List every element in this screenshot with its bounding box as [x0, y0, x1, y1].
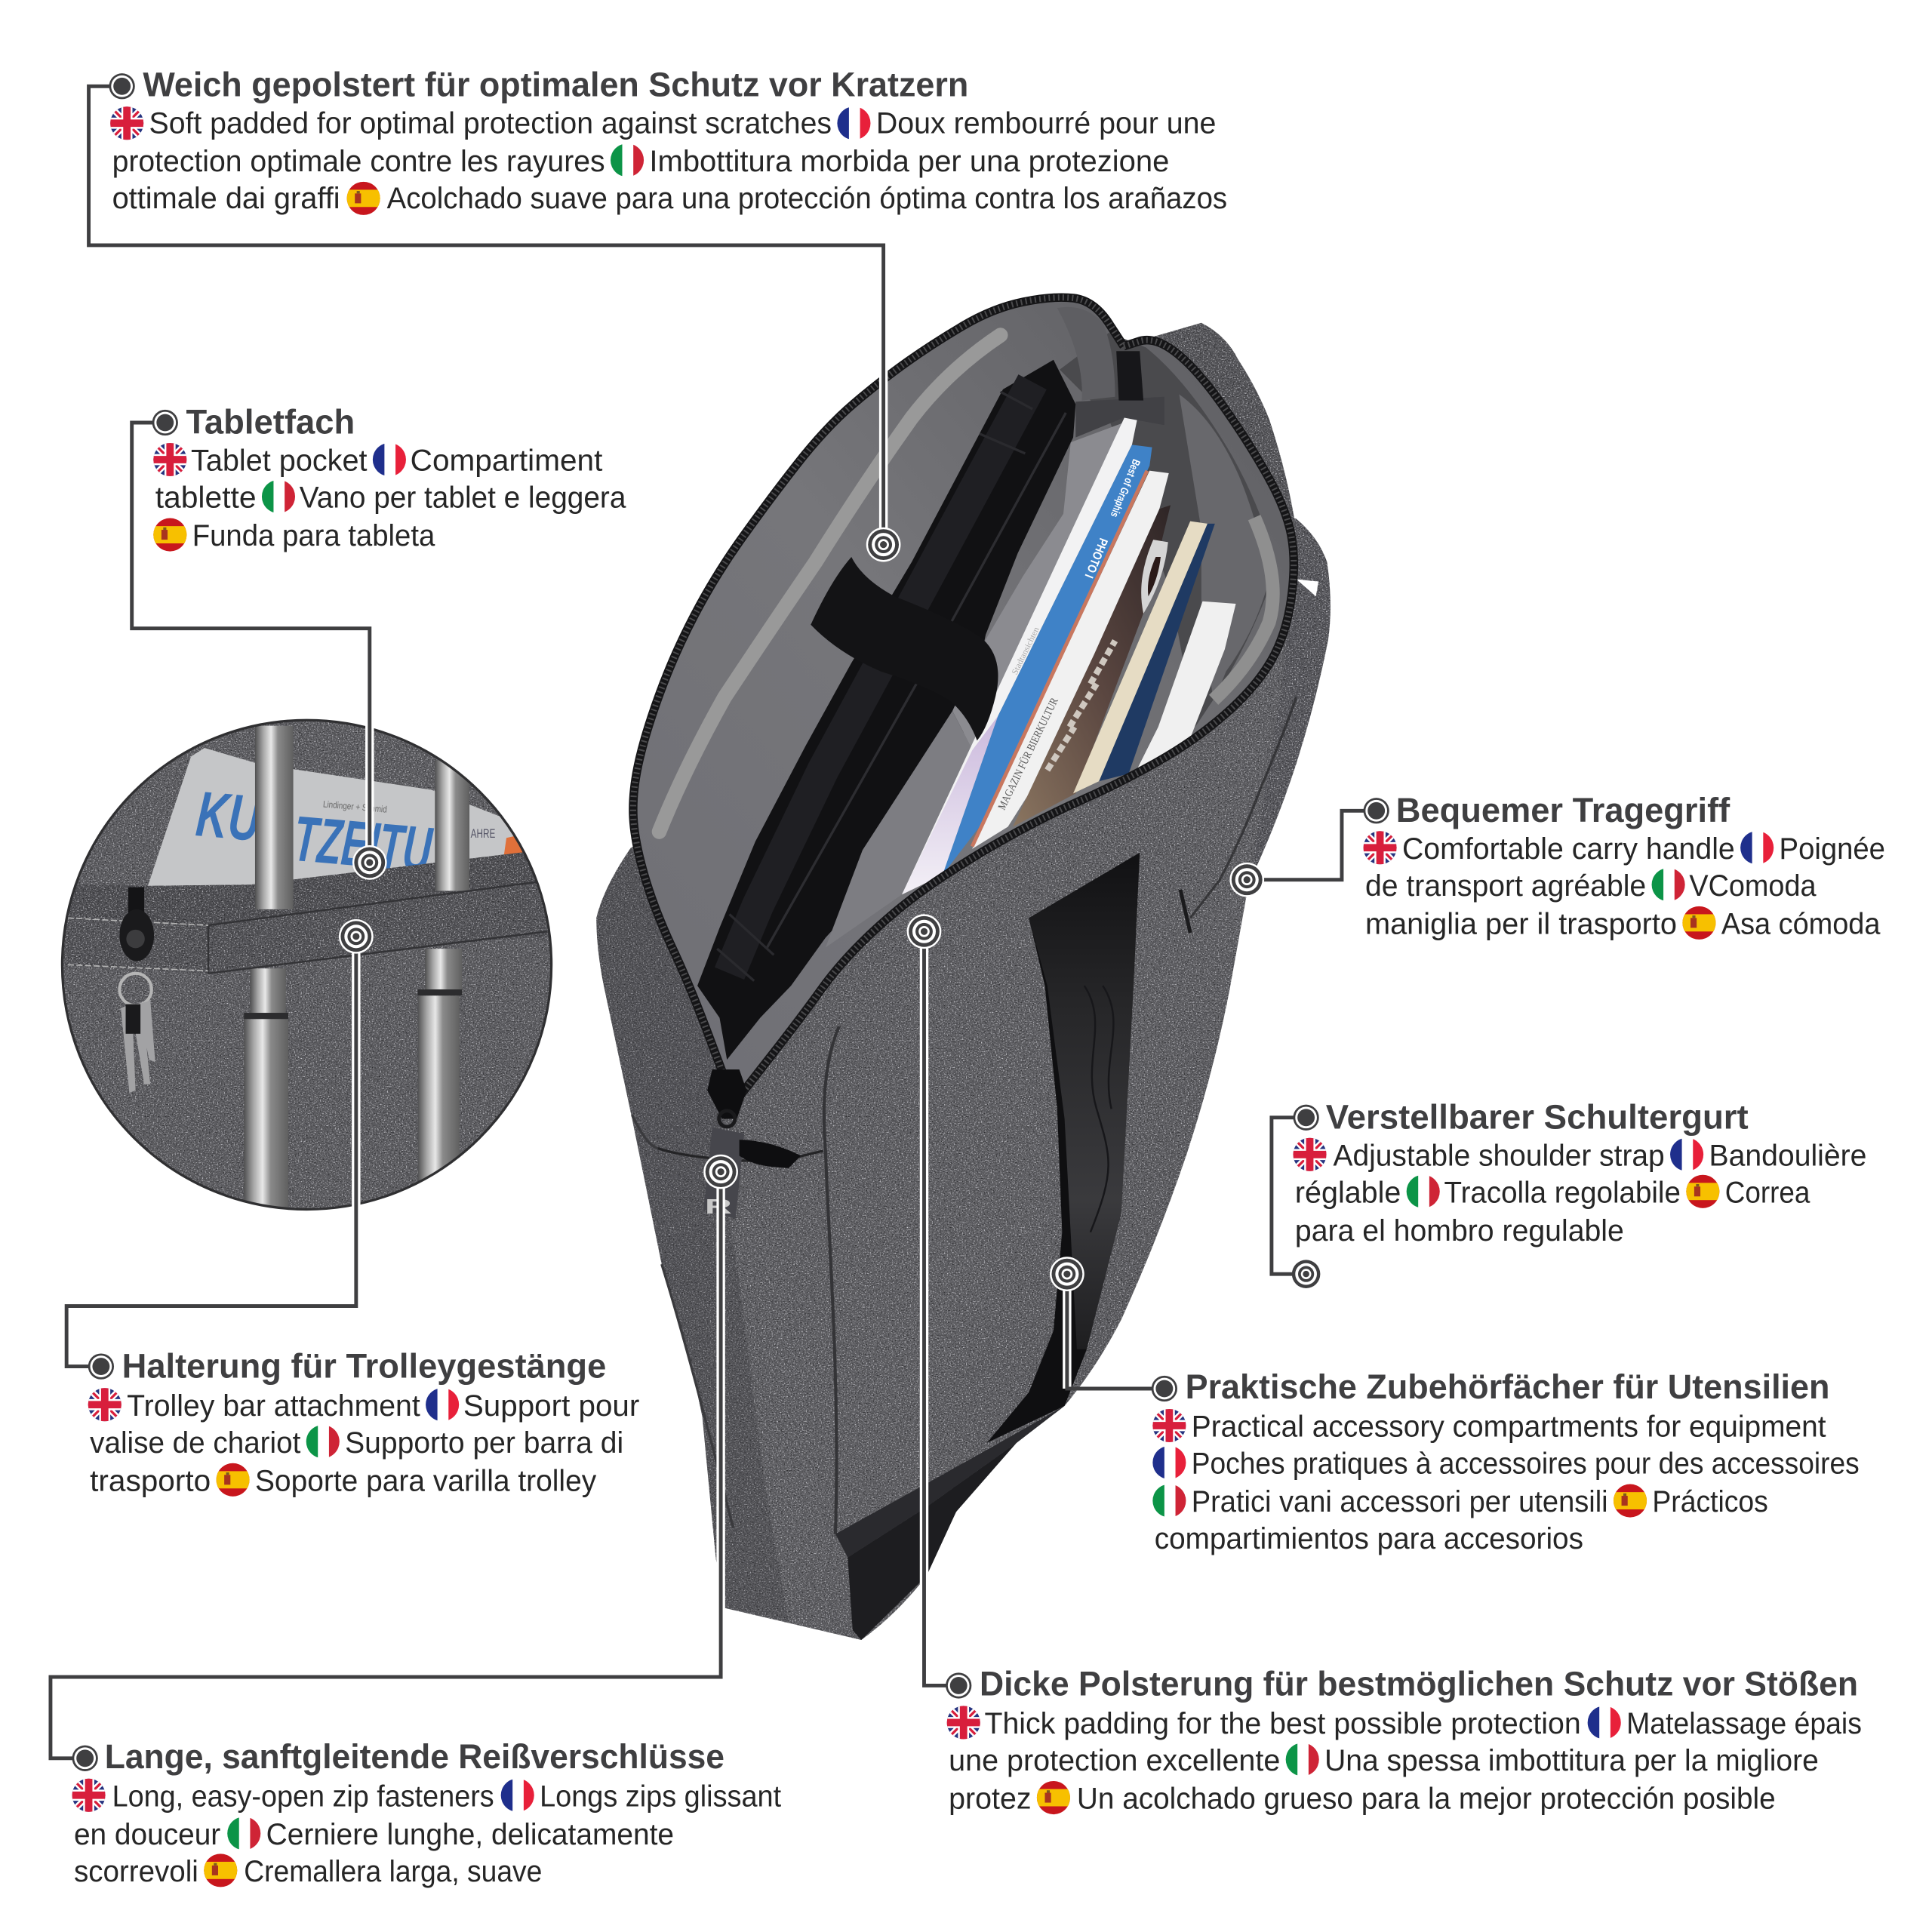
- flag FR: [500, 1778, 536, 1813]
- body text: Prácticos: [1652, 1485, 1768, 1518]
- rear black patch: [1116, 351, 1143, 401]
- flag UK: [1152, 1408, 1186, 1443]
- key dark head: [126, 1004, 140, 1034]
- laptop highlight: [730, 382, 1032, 974]
- target: padding: [866, 528, 900, 561]
- rear top handle: [1146, 323, 1297, 555]
- leader lines: [51, 86, 1377, 1758]
- right pole base: [417, 995, 460, 1180]
- flag UK: [109, 106, 144, 140]
- zipper: [633, 297, 1294, 1097]
- flag IT: [610, 143, 646, 177]
- body text: Vano per tablet e leggera: [300, 481, 626, 515]
- body text: Practical accessory compartments for equipment: [1192, 1411, 1826, 1444]
- body text: Tracolla regolabile: [1444, 1176, 1681, 1209]
- bottom leather trim: [835, 1406, 1065, 1558]
- body text: Long, easy-open zip fasteners: [112, 1780, 494, 1813]
- left pole collar: [244, 1013, 288, 1019]
- laptop: [697, 360, 1075, 1060]
- key ring: [119, 974, 152, 1005]
- target: zip: [703, 1155, 738, 1189]
- body text: Longs zips glissant: [540, 1780, 781, 1813]
- gap in handle: [1297, 579, 1318, 596]
- band left fabric seam: [68, 918, 208, 971]
- target: handle: [1229, 863, 1264, 897]
- flag ES: [1613, 1484, 1647, 1518]
- body text: Comfortable carry handle: [1402, 832, 1735, 866]
- target: tablet: [352, 845, 387, 880]
- heading: Weich gepolstert für optimalen Schutz vor Kratzern: [143, 65, 968, 103]
- body text: Poches pratiques à accessoires pour des accessoires: [1192, 1447, 1860, 1481]
- callout: soft padding: [109, 65, 1227, 216]
- key clip: [119, 909, 154, 961]
- target: trolley: [339, 919, 374, 954]
- top fold lining: [1057, 307, 1115, 401]
- laptop joint lines: [717, 392, 1032, 981]
- inset magazine small text: Lindinger + Schmid: [322, 798, 387, 815]
- body text: Adjustable shoulder strap: [1334, 1139, 1665, 1172]
- white magazine 3: [972, 471, 1169, 849]
- flag UK: [946, 1706, 981, 1740]
- flag FR: [425, 1387, 461, 1422]
- bullet: [1293, 1105, 1319, 1131]
- lining piping left: [659, 335, 1001, 832]
- body text: Poignée: [1780, 832, 1885, 866]
- flag ES: [1036, 1780, 1071, 1815]
- laptop edge line: [767, 413, 1066, 949]
- photo magazine bands: [1048, 641, 1115, 770]
- flag FR: [372, 442, 408, 477]
- body text: para el hombro regulable: [1295, 1214, 1624, 1247]
- heading: Dicke Polsterung für bestmöglichen Schutz vor Stößen: [980, 1665, 1858, 1703]
- body text: réglable: [1295, 1176, 1401, 1209]
- flag IT: [1651, 867, 1687, 902]
- heading: Praktische Zubehörfächer für Utensilien: [1186, 1367, 1829, 1406]
- body text: VComoda: [1689, 869, 1817, 903]
- body text: Supporto per barra di: [345, 1426, 623, 1460]
- flag FR: [1669, 1137, 1706, 1172]
- trolley strap band: [63, 910, 522, 974]
- inset magazine title left: KU: [193, 777, 265, 854]
- bullet: [152, 410, 178, 435]
- callout: accessory compartments: [1152, 1367, 1860, 1555]
- white book: [1137, 601, 1236, 769]
- zipper clip: [740, 1140, 801, 1168]
- key clip strap: [128, 888, 144, 914]
- body text: Una spessa imbottitura per la migliore: [1324, 1744, 1819, 1777]
- inset pocket fabric: [69, 853, 549, 940]
- body text: Thick padding for the best possible protection: [984, 1707, 1581, 1740]
- heading: Lange, sanftgleitende Reißverschlüsse: [105, 1737, 724, 1776]
- callout: carry handle: [1363, 791, 1885, 941]
- bag photo illustration: [596, 297, 1331, 1640]
- flag IT: [1285, 1743, 1321, 1777]
- side pocket seam: [658, 1149, 823, 1161]
- zipper pull tab: [703, 1128, 744, 1219]
- body text: une protection excellente: [949, 1744, 1280, 1777]
- callout: zip fasteners: [72, 1737, 781, 1888]
- flag UK: [152, 442, 187, 477]
- flag IT: [1152, 1484, 1188, 1518]
- keys: [121, 1001, 155, 1093]
- body text: Soporte para varilla trolley: [255, 1465, 596, 1498]
- flag IT: [306, 1424, 341, 1459]
- bullet: [88, 1353, 114, 1380]
- inset circle photo: trolley attachment: [62, 719, 555, 1210]
- inset magazine year text: AHRE: [471, 827, 495, 841]
- callout: shoulder strap: [1293, 1098, 1866, 1247]
- body text: protez: [949, 1783, 1032, 1816]
- body text: Compartiment: [411, 445, 602, 478]
- inset fabric: [62, 719, 555, 1210]
- right pole upper: [435, 760, 469, 891]
- body text: protection optimale contre les rayures: [112, 145, 605, 178]
- salmon spine: [972, 471, 1147, 847]
- blue magazine: [943, 445, 1152, 875]
- heading: Tabletfach: [186, 403, 355, 441]
- flag FR: [1587, 1706, 1623, 1740]
- body text: Asa cómoda: [1721, 908, 1881, 941]
- tab logo: R: [705, 1195, 732, 1218]
- heading: Bequemer Tragegriff: [1396, 791, 1730, 829]
- bullet: [946, 1672, 971, 1699]
- inset orange corner: [504, 836, 522, 854]
- flag IT: [1406, 1174, 1441, 1209]
- flag UK: [1293, 1137, 1327, 1172]
- body text: Trolley bar attachment: [127, 1389, 420, 1423]
- bag body fabric: [596, 616, 1289, 1640]
- body text: Acolchado suave para una protección óptima contra los arañazos: [387, 182, 1227, 215]
- flag FR: [1740, 830, 1776, 865]
- heading: Verstellbarer Schultergurt: [1326, 1098, 1749, 1137]
- flag FR: [837, 106, 872, 140]
- rear right lining: [1179, 394, 1269, 703]
- left pole base: [244, 1019, 288, 1208]
- lower lining: [826, 711, 974, 948]
- strip embossing: [1084, 986, 1113, 1232]
- carry handle: [1180, 515, 1331, 933]
- spine text: Best of Graphis: [1108, 457, 1142, 519]
- bullet: [1152, 1376, 1177, 1401]
- spine text 4: Stadtansichten: [1011, 626, 1041, 676]
- carry handle flap: [1180, 890, 1190, 933]
- inner pocket lining: [952, 423, 1124, 752]
- flag ES: [216, 1463, 250, 1497]
- flag ES: [1682, 906, 1716, 940]
- body text: ottimale dai graffi: [112, 182, 340, 215]
- body text: Pratici vani accessori per utensili: [1192, 1485, 1608, 1518]
- photo magazine crescent: [1141, 540, 1168, 614]
- magazines and books: [902, 417, 1236, 894]
- callout: tablet pocket: [152, 403, 626, 552]
- flag ES: [203, 1854, 238, 1887]
- inset circle outline: [62, 720, 552, 1209]
- body text: trasporto: [90, 1465, 211, 1498]
- body text: Cerniere lunghe, delicatamente: [266, 1818, 674, 1851]
- flag UK: [1363, 830, 1397, 865]
- body text: de transport agréable: [1365, 869, 1646, 903]
- bottom mesh: [848, 1443, 1017, 1640]
- rear top band: [1075, 397, 1164, 438]
- body text: Tablet pocket: [191, 445, 368, 478]
- black webbing strap: [811, 557, 998, 740]
- body text: valise de chariot: [90, 1426, 300, 1460]
- bullet: [1364, 798, 1389, 823]
- target: thick padding: [907, 914, 941, 949]
- right pole lower: [425, 949, 462, 993]
- black panel shadow: [987, 918, 1109, 1443]
- navy book: [1099, 524, 1215, 781]
- flag ES: [152, 518, 187, 552]
- body text: Funda para tableta: [192, 519, 435, 552]
- flag ES: [346, 181, 380, 216]
- front panel seam: [824, 1026, 839, 1534]
- side panel shade: [596, 848, 789, 1622]
- bullet: [72, 1746, 98, 1771]
- body text: Doux rembourré pour une: [876, 106, 1216, 140]
- zipper teeth: [633, 297, 1294, 1097]
- lining piping right: [1214, 518, 1273, 700]
- flag ES: [1685, 1174, 1720, 1209]
- dark photo magazine: [1013, 505, 1171, 827]
- spine text 3: MAGAZIN FÜR BIERKULTUR: [995, 696, 1061, 812]
- body text: Cremallera larga, suave: [244, 1855, 542, 1888]
- cream book: [1073, 521, 1208, 793]
- body text: Imbottitura morbida per una protezione: [649, 145, 1169, 178]
- body text: Soft padded for optimal protection against scratches: [149, 106, 832, 140]
- inset magazine: [148, 748, 524, 886]
- black centre strip: [1029, 853, 1140, 1349]
- body text: Bandoulière: [1709, 1139, 1866, 1172]
- body text: en douceur: [74, 1818, 220, 1851]
- target: shoulder strap: [1292, 1260, 1320, 1288]
- callout: thick padding: [946, 1665, 1862, 1816]
- key clip button: [126, 930, 145, 948]
- flag IT: [226, 1817, 263, 1850]
- left pole upper: [255, 726, 294, 909]
- flag IT: [261, 479, 297, 514]
- target: compartments: [1050, 1257, 1084, 1291]
- body text: compartimientos para accesorios: [1155, 1522, 1583, 1555]
- flag UK: [88, 1387, 122, 1422]
- right pole collar: [417, 989, 462, 995]
- band edges: [208, 881, 547, 974]
- flag FR: [1152, 1445, 1188, 1480]
- zipper slider: [707, 1069, 746, 1118]
- body text: Un acolchado grueso para la mejor protección posible: [1077, 1783, 1776, 1816]
- target markers: [339, 528, 1320, 1291]
- lavender cover: [902, 716, 998, 894]
- left pole lower: [250, 968, 286, 1019]
- body text: Correa: [1725, 1176, 1810, 1209]
- body text: Support pour: [463, 1389, 639, 1423]
- carry handle inner edge: [1190, 697, 1297, 918]
- heading: Halterung für Trolleygestänge: [122, 1346, 606, 1385]
- callout: trolley attachment: [88, 1346, 639, 1498]
- body text: Matelassage épais: [1626, 1707, 1862, 1740]
- bullet: [109, 73, 135, 99]
- spine text 2: PHOTO I: [1081, 536, 1110, 580]
- body text: scorrevoli: [74, 1855, 198, 1888]
- white magazine: [902, 417, 1137, 894]
- inset magazine title right: TZEITU: [291, 802, 435, 886]
- zipper ring: [719, 1111, 735, 1127]
- bag interior lining: [633, 297, 1294, 1097]
- body text: tablette: [155, 481, 257, 515]
- rear dark lining: [1060, 333, 1276, 727]
- body text: maniglia per il trasporto: [1365, 908, 1677, 941]
- photo magazine crescent centre: [1148, 557, 1161, 596]
- leader lines: white casings over images: [356, 370, 1067, 1632]
- left fold seam: [632, 1115, 733, 1527]
- flag UK: [72, 1778, 106, 1813]
